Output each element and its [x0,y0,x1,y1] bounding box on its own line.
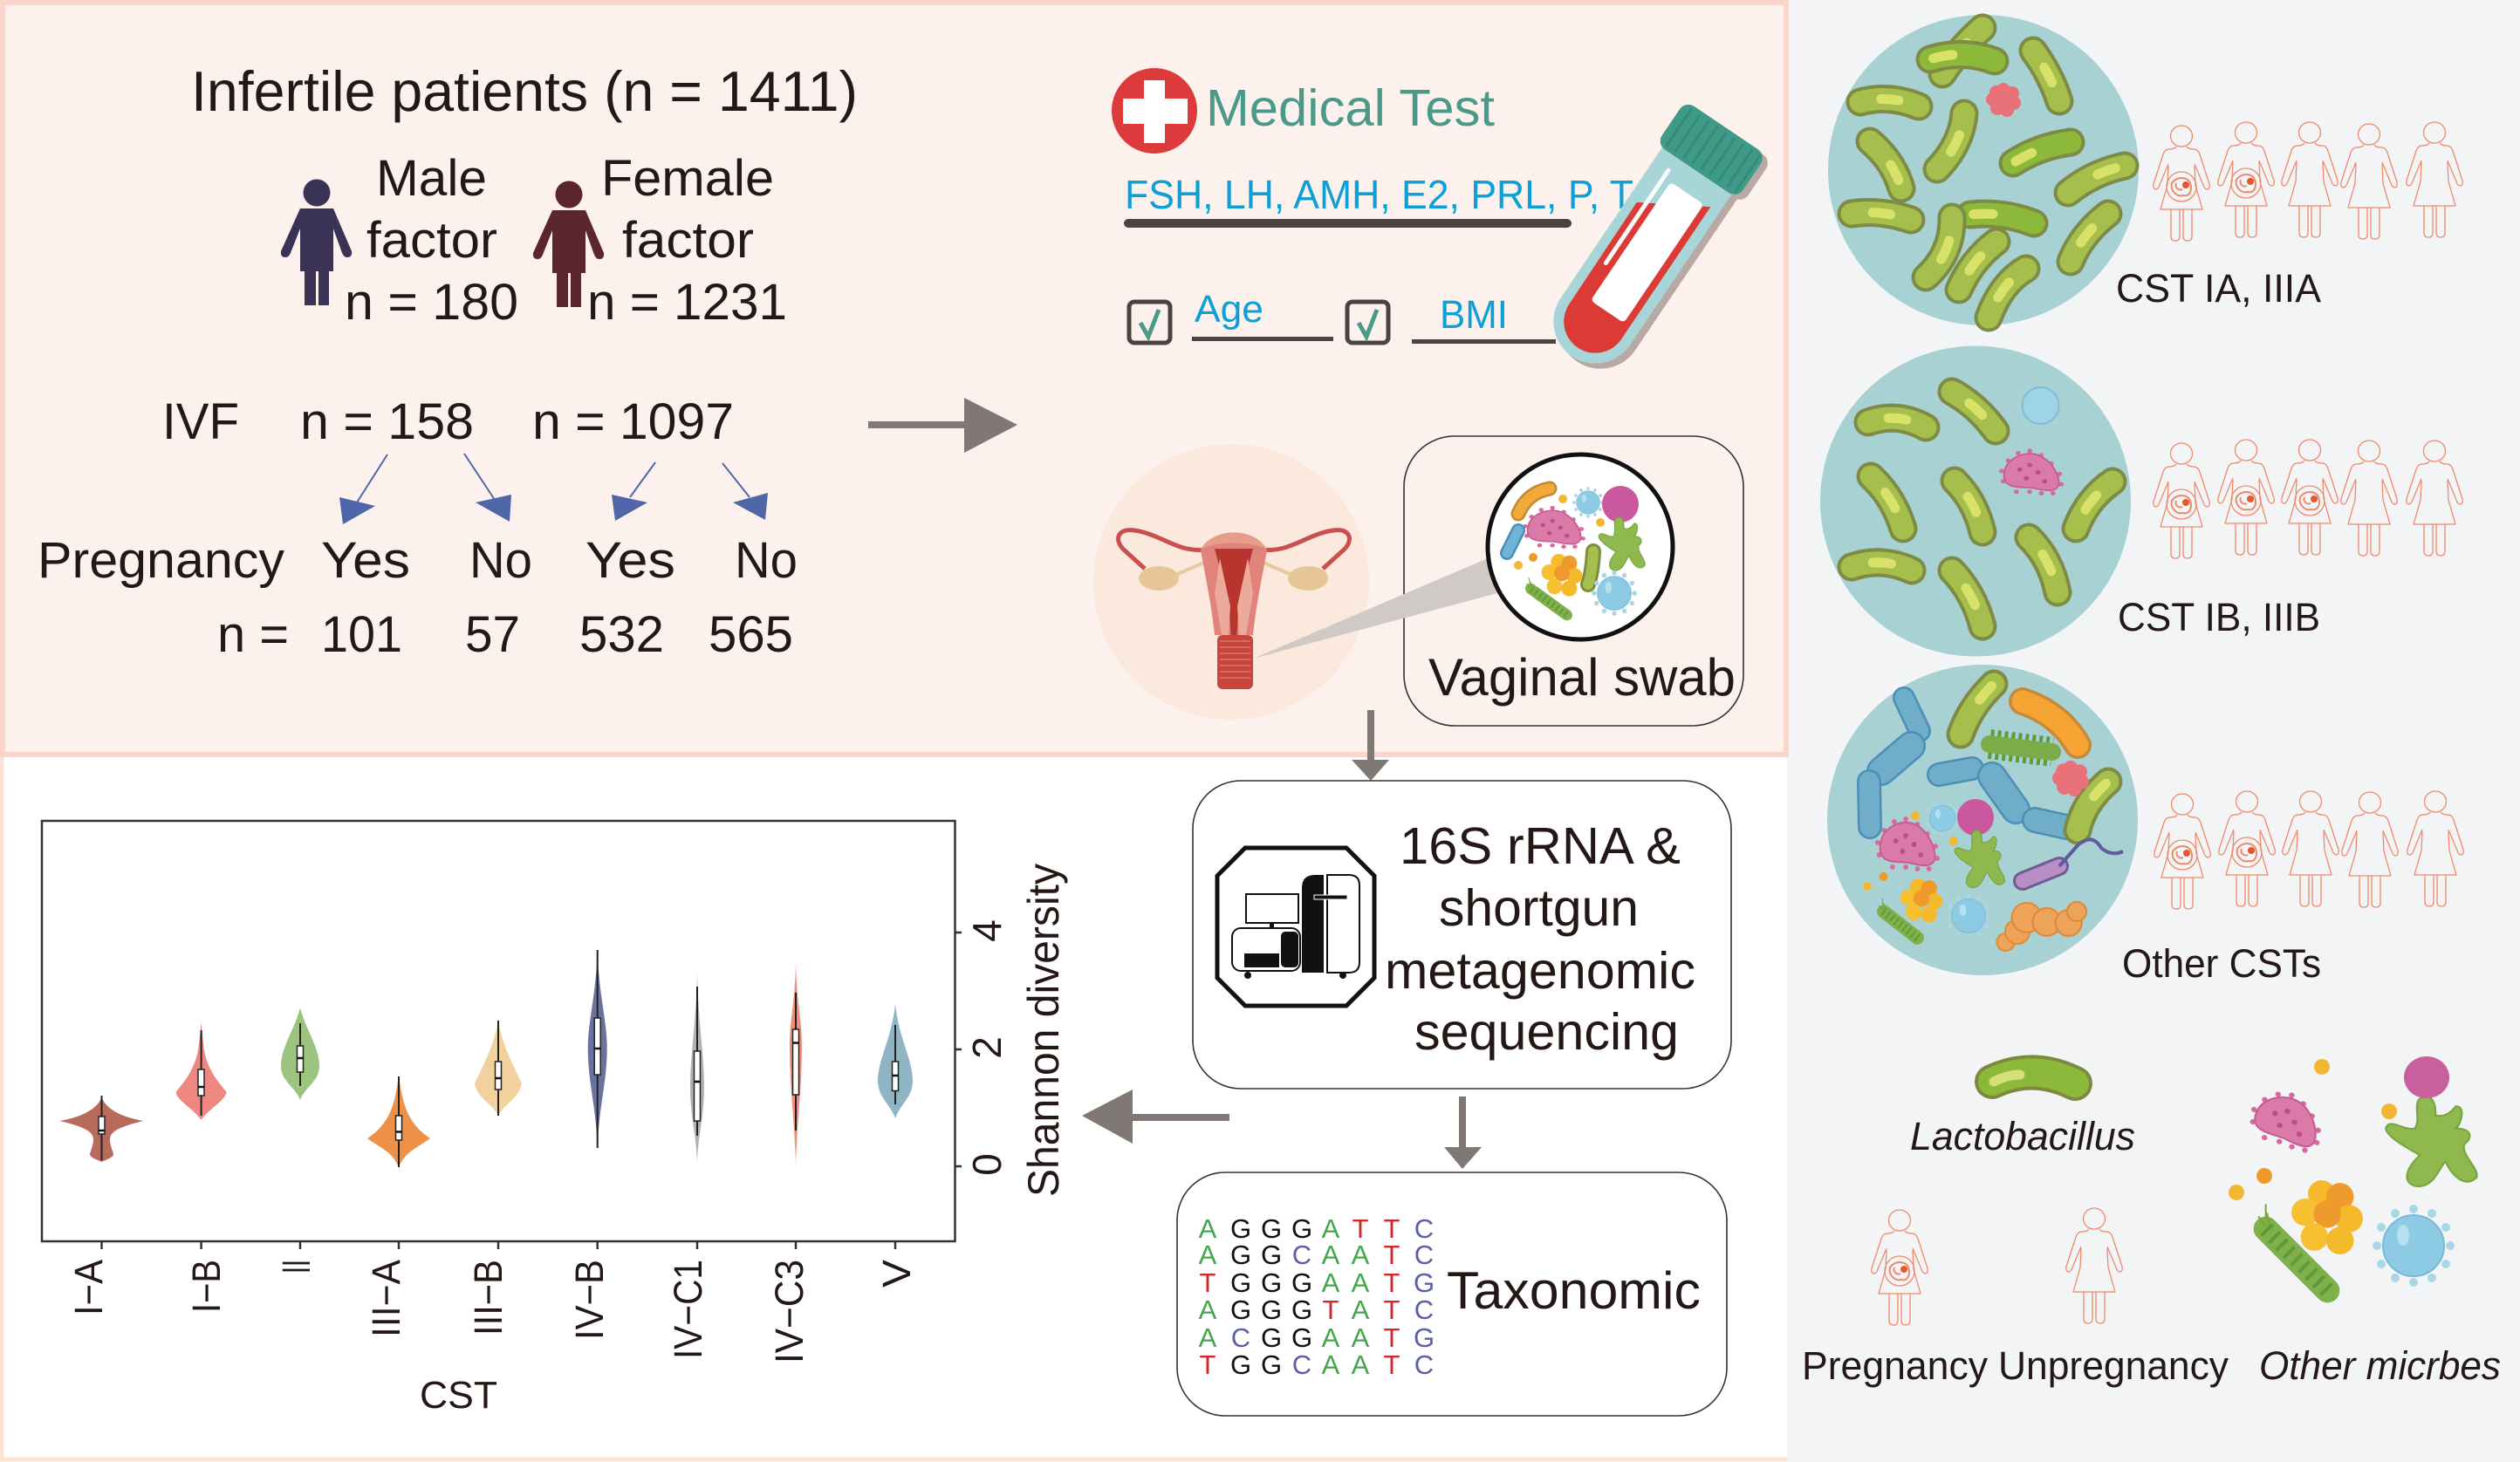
x tick labels: II [274,1260,318,1274]
x tick labels: I−A [66,1260,111,1315]
text: sequencing [1385,817,1695,1061]
arrows: IVF to pregnancy outcome [339,454,768,524]
sequence alignment: G [1291,1295,1312,1325]
sequence alignment: T [1384,1267,1400,1298]
checkbox: bmi [1347,302,1388,343]
arrow: sequencing to chart [1082,1090,1229,1144]
violin: III-A [367,1076,430,1167]
x tick labels: III−B [466,1260,510,1336]
violin: I-A [59,1096,143,1162]
sequence alignment: C [1231,1322,1250,1353]
text: bmi: BMI [1440,292,1508,337]
icon: magnified microbes [1488,454,1673,639]
sequence alignment: T [1200,1267,1216,1298]
sequence alignment: T [1384,1213,1400,1244]
sequence alignment: A [1352,1349,1370,1380]
text: sequencing: metagenomic [1385,942,1695,1000]
sequence alignment: G [1230,1213,1251,1244]
sequence alignment: C [1414,1240,1434,1270]
text: counts row: 101 [321,606,402,663]
text: IVF row [162,393,734,450]
x tick labels: III−A [364,1260,408,1337]
sequence alignment: G [1230,1240,1251,1270]
sequence alignment: T [1384,1295,1400,1325]
text: counts row [217,606,793,663]
sequence alignment: A [1322,1240,1340,1270]
legend: pregnancy label: Pregnancy [1802,1343,1988,1388]
icon: medical cross [1112,68,1197,154]
text: pregnancy row: No [735,532,798,589]
sequence alignment: G [1261,1213,1282,1244]
icon: male figure [281,180,352,305]
sequence alignment: A [1322,1213,1340,1244]
legend: lactobacillus label: Lactobacillus [1910,1114,2135,1158]
sequence alignment: G [1230,1295,1251,1325]
violin: IV-C3 [790,963,802,1165]
sequence alignment: C [1414,1349,1434,1380]
sequence alignment: T [1384,1240,1400,1270]
sequence alignment: G [1261,1349,1282,1380]
callout wedge [1253,558,1497,659]
x tick labels: V [874,1260,919,1288]
text: female factor: n = 1231 [587,274,787,331]
legend: other microbes icons [2229,1056,2476,1290]
label: other CSTs: Other CSTs [2122,941,2321,986]
text: male factor: Male [376,150,487,207]
text: pregnancy row: Pregnancy [38,532,284,589]
legend: lactobacillus icon [1992,1072,2075,1083]
text: pregnancy row [38,532,798,589]
text: counts row: n = [217,606,289,663]
violin: III-B [475,1021,522,1116]
arrow: swab to sequencing [1352,710,1389,781]
sequence alignment: G [1291,1213,1312,1244]
icon: sequencer [1217,848,1374,1006]
text: age: Age [1195,288,1263,331]
sequence alignment: C [1414,1295,1434,1325]
text: counts row: 532 [579,606,664,663]
sequence alignment: T [1323,1295,1339,1325]
label: CST IB, IIIB: CST IB, IIIB [2118,595,2320,639]
women row 3 [2154,791,2463,909]
sequence alignment: G [1230,1267,1251,1298]
panel: cohort and sampling [3,3,1786,755]
y tick labels [964,919,1010,1176]
x tick labels: I−B [184,1260,229,1313]
text: sequencing: 16S rRNA & [1400,817,1681,875]
legend: non-pregnant woman [2066,1208,2122,1323]
panel: sequencing box [1193,781,1731,1089]
panel: background right [1787,0,2520,1462]
arrow: sequencing to taxonomic [1444,1096,1482,1169]
text: sequencing: sequencing [1414,1003,1679,1061]
checkbox: age [1129,302,1170,343]
text: taxonomic: Taxonomic [1447,1261,1701,1320]
heading: medical test: Medical Test [1206,79,1495,137]
arrow: to medical test [868,398,1017,453]
legend: other microbes label: Other micrbes [2259,1343,2501,1388]
text: pregnancy row: No [469,532,532,589]
sequence alignment: A [1322,1267,1340,1298]
x tick labels: IV−C1 [666,1260,710,1359]
text: counts row: 57 [465,606,520,663]
sequence alignment: A [1352,1240,1370,1270]
sequence alignment: A [1322,1349,1340,1380]
panel: taxonomic box [1177,1172,1727,1416]
violin: I-B [176,1022,227,1120]
x axis title: CST [420,1374,497,1417]
sequence alignment: A [1199,1295,1217,1325]
sequence alignment: A [1199,1240,1217,1270]
x tick labels: IV−B [567,1260,612,1340]
text: female factor: Female [601,150,774,207]
underline: age [1192,337,1333,341]
chart frame and ticks [42,821,962,1249]
icon: blood tube [1531,100,1772,389]
text: female factor: factor [622,212,754,269]
y tick labels: 2 [964,1036,1010,1059]
panel border bottom [2,757,1787,1459]
text: male factor [345,150,518,331]
violin: V [878,1004,913,1118]
sequence alignment: G [1291,1322,1312,1353]
sequence alignment: T [1384,1322,1400,1353]
legend: pregnant woman [1872,1210,1928,1325]
text: sequencing: shortgun [1439,879,1639,937]
text: male factor: factor [366,212,497,269]
sequence alignment: T [1384,1349,1400,1380]
panel: vaginal swab [1404,436,1743,726]
women row 1 [2154,122,2462,241]
x tick labels: IV−C3 [767,1260,811,1363]
sequence alignment: A [1199,1213,1217,1244]
violin: IV-C1 [690,973,704,1163]
sequence alignment: A [1199,1322,1217,1353]
sequence alignment [1199,1213,1435,1380]
x tick labels [66,1260,919,1363]
text: hormones: FSH, LH, AMH, E2, PRL, P, T [1125,172,1633,217]
icon: uterus [1093,444,1369,720]
sequence alignment: G [1261,1322,1282,1353]
legend: unpregnancy label: Unpregnancy [1998,1343,2229,1388]
label: CST IA, IIIA: CST IA, IIIA [2116,266,2321,311]
text: pregnancy row: Yes [585,532,675,589]
sequence alignment: G [1261,1240,1282,1270]
women row 2 [2154,440,2462,558]
microbes circle: CST IA, IIIA [1828,15,2139,325]
y axis title: Shannon diversity [1019,864,1068,1197]
sequence alignment: T [1200,1349,1216,1380]
sequence alignment: T [1352,1213,1369,1244]
y tick labels: 0 [964,1153,1010,1176]
text: counts row: 565 [709,606,793,663]
text: male factor: n = 180 [345,274,518,331]
text: female factor [587,150,787,331]
text: IVF row: n = 1097 [532,393,734,450]
violin: IV-B [588,950,607,1148]
underline: bmi [1412,339,1556,344]
microbes circle: CST IB, IIIB [1820,345,2131,656]
violin: II [281,1008,319,1100]
text: IVF row: n = 158 [300,393,474,450]
sequence alignment: G [1230,1349,1251,1380]
sequence alignment: G [1414,1322,1435,1353]
sequence alignment: A [1352,1267,1370,1298]
text: pregnancy row: Yes [321,532,410,589]
sequence alignment: A [1352,1295,1370,1325]
sequence alignment: A [1322,1322,1340,1353]
panel: sequencing and results [0,757,1787,1462]
sequence alignment: G [1291,1267,1312,1298]
microbes circle: other CSTs [1827,665,2138,975]
sequence alignment: C [1414,1213,1434,1244]
sequence alignment: C [1292,1240,1311,1270]
sequence alignment: G [1261,1295,1282,1325]
sequence alignment: G [1261,1267,1282,1298]
violin chart [42,821,1068,1417]
sequence alignment: C [1292,1349,1311,1380]
title: Infertile patients (n = 1411) [191,59,858,123]
text: IVF row: IVF [162,393,239,450]
sequence alignment: G [1414,1267,1435,1298]
underline: hormones [1124,219,1572,228]
y tick labels: 4 [964,919,1010,942]
text: vaginal swab: Vaginal swab [1428,648,1736,707]
sequence alignment: A [1352,1322,1370,1353]
icon: female figure [533,181,604,307]
